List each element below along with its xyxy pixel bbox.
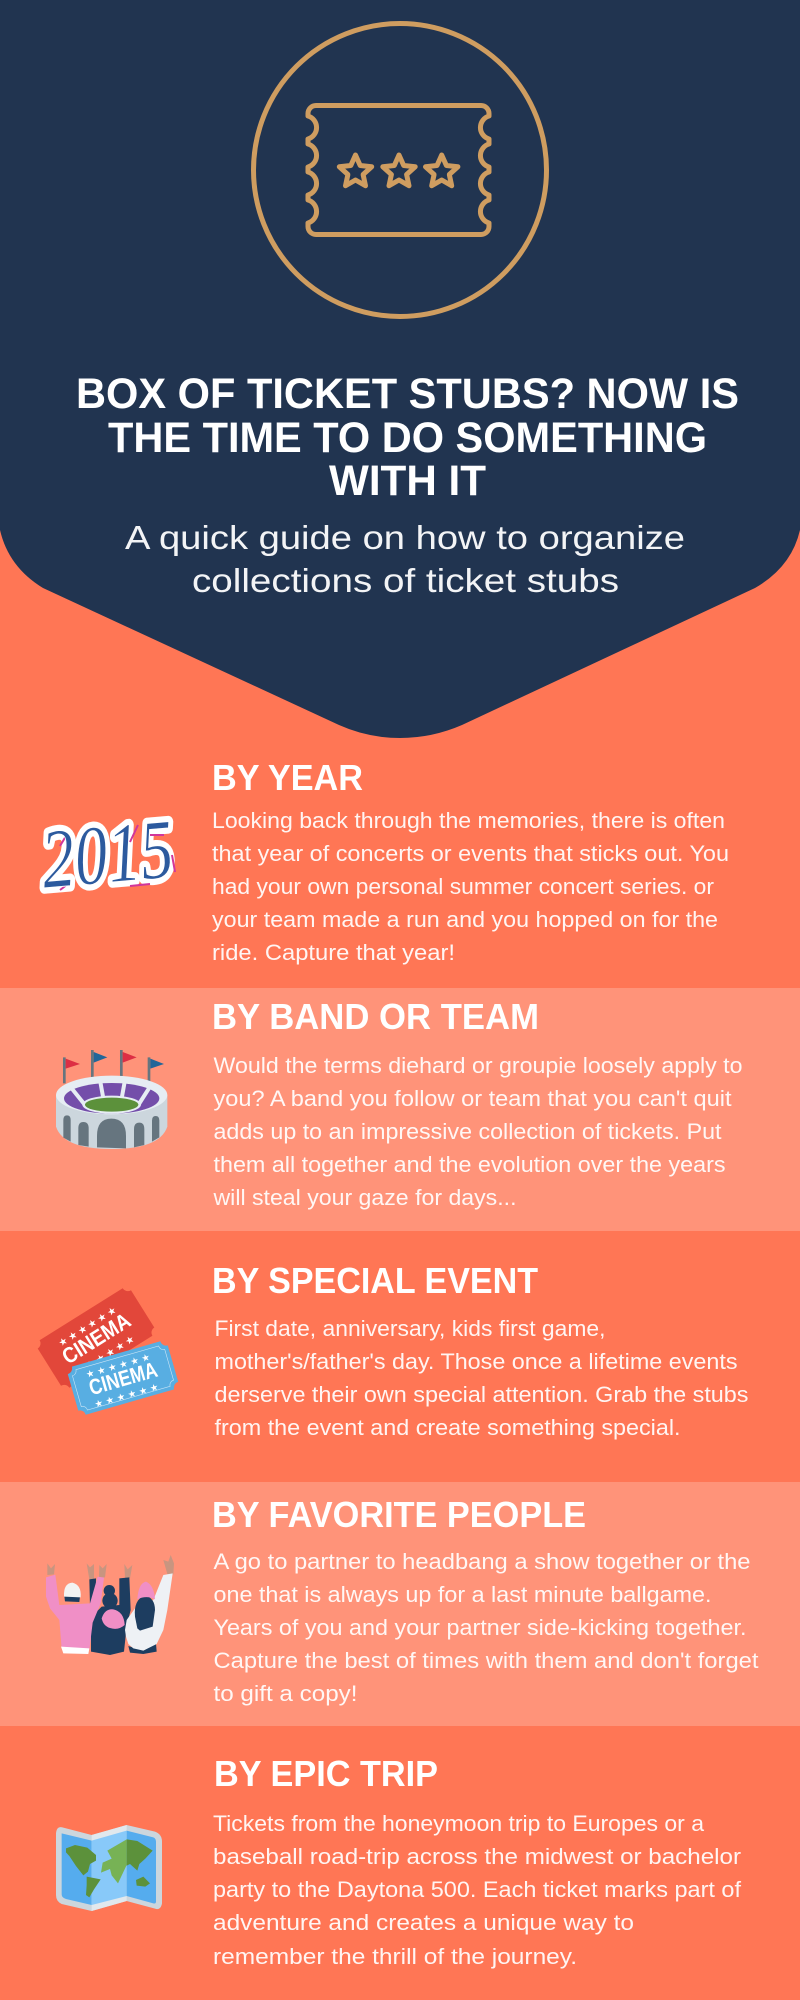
body: by special event: mother's/father's day. Those once a lifetime events	[214, 1349, 738, 1374]
subtitle: A quick guide on how to organize	[125, 519, 685, 556]
body: by favorite people: A go to partner to headbang a show together or the	[214, 1549, 750, 1574]
icon: ticket in circle	[254, 24, 546, 316]
body: by band or team: adds up to an impressive collection of tickets. Put	[214, 1119, 722, 1144]
panel: by favorite people	[46, 1494, 759, 1706]
blue ticket: CINEMA	[86, 1357, 160, 1400]
blue ticket: ★★★★★★	[93, 1381, 163, 1411]
icon: 2015 lettering: 2015	[37, 802, 177, 907]
icon: three friends	[46, 1555, 174, 1655]
subtitle	[125, 519, 685, 599]
panel: by band or team background	[0, 988, 800, 1231]
blue ticket	[66, 1340, 180, 1416]
panel: by band or team	[56, 996, 742, 1210]
body: by year: your team made a run and you hopped on for the	[212, 907, 718, 932]
heading: by special event: BY SPECIAL EVENT	[212, 1260, 538, 1301]
subtitle: collections of ticket stubs	[192, 562, 619, 599]
title: BOX OF TICKET STUBS? NOW IS	[76, 370, 739, 418]
icon: world map	[56, 1825, 162, 1911]
body: by favorite people: Years of you and your partner side-kicking together.	[214, 1615, 746, 1640]
panel: by special event	[35, 1260, 749, 1440]
red ticket: CINEMA	[57, 1308, 135, 1369]
title: WITH IT	[329, 457, 486, 505]
icon: cinema tickets	[35, 1285, 180, 1416]
body: by year	[212, 808, 729, 965]
body: by band or team	[212, 1053, 743, 1210]
panel: by epic trip	[56, 1753, 742, 1969]
body: by favorite people: one that is always up for a last minute ballgame.	[214, 1582, 712, 1607]
body: by special event: derserve their own special attention. Grab the stubs	[214, 1382, 748, 1407]
body: by band or team: will steal your gaze for days...	[212, 1185, 517, 1210]
title	[76, 370, 739, 505]
panel: by favorite people background	[0, 1482, 800, 1726]
body: by epic trip: party to the Daytona 500. Each ticket marks part of	[213, 1877, 742, 1902]
body: by year: Looking back through the memories, there is often	[212, 808, 725, 833]
body: by favorite people: to gift a copy!	[214, 1681, 358, 1706]
body: by epic trip	[213, 1811, 742, 1969]
body: by epic trip: baseball road-trip across the midwest or bachelor	[213, 1844, 741, 1869]
body: by band or team: you? A band you follow or team that you can't quit	[214, 1086, 732, 1111]
body: by special event	[214, 1316, 748, 1440]
heading: by band or team: BY BAND OR TEAM	[212, 996, 539, 1037]
icon: 2015 lettering: 2015	[37, 802, 177, 907]
body: by band or team: Would the terms diehard or groupie loosely apply to	[214, 1053, 742, 1078]
heading: by year: BY YEAR	[212, 757, 363, 798]
body: by epic trip: Tickets from the honeymoon trip to Europes or a	[213, 1811, 705, 1836]
heading: by favorite people: BY FAVORITE PEOPLE	[212, 1494, 586, 1535]
red ticket: ★★★★★★	[57, 1304, 121, 1349]
body: by epic trip: remember the thrill of the journey.	[213, 1944, 577, 1969]
red ticket	[35, 1285, 157, 1391]
body: by year: had your own personal summer concert series. or	[212, 874, 714, 899]
title: THE TIME TO DO SOMETHING	[108, 414, 707, 462]
body: by favorite people	[214, 1549, 758, 1706]
panel: by year	[37, 757, 729, 965]
header banner shape	[0, 0, 800, 738]
red ticket: ★★★★★★	[75, 1332, 139, 1378]
body: by epic trip: adventure and creates a unique way to	[213, 1910, 634, 1935]
body: by favorite people: Capture the best of times with them and don't forget	[214, 1648, 758, 1673]
body: by year: that year of concerts or events that sticks out. You	[212, 841, 729, 866]
blue ticket: ★★★★★★	[85, 1351, 154, 1381]
body: by band or team: them all together and the evolution over the years	[214, 1152, 726, 1177]
body: by year: ride. Capture that year!	[212, 940, 455, 965]
heading: by epic trip: BY EPIC TRIP	[214, 1753, 438, 1794]
body: by special event: from the event and create something special.	[214, 1415, 680, 1440]
body: by special event: First date, anniversary, kids first game,	[214, 1316, 606, 1341]
icon: stadium	[56, 1050, 167, 1149]
